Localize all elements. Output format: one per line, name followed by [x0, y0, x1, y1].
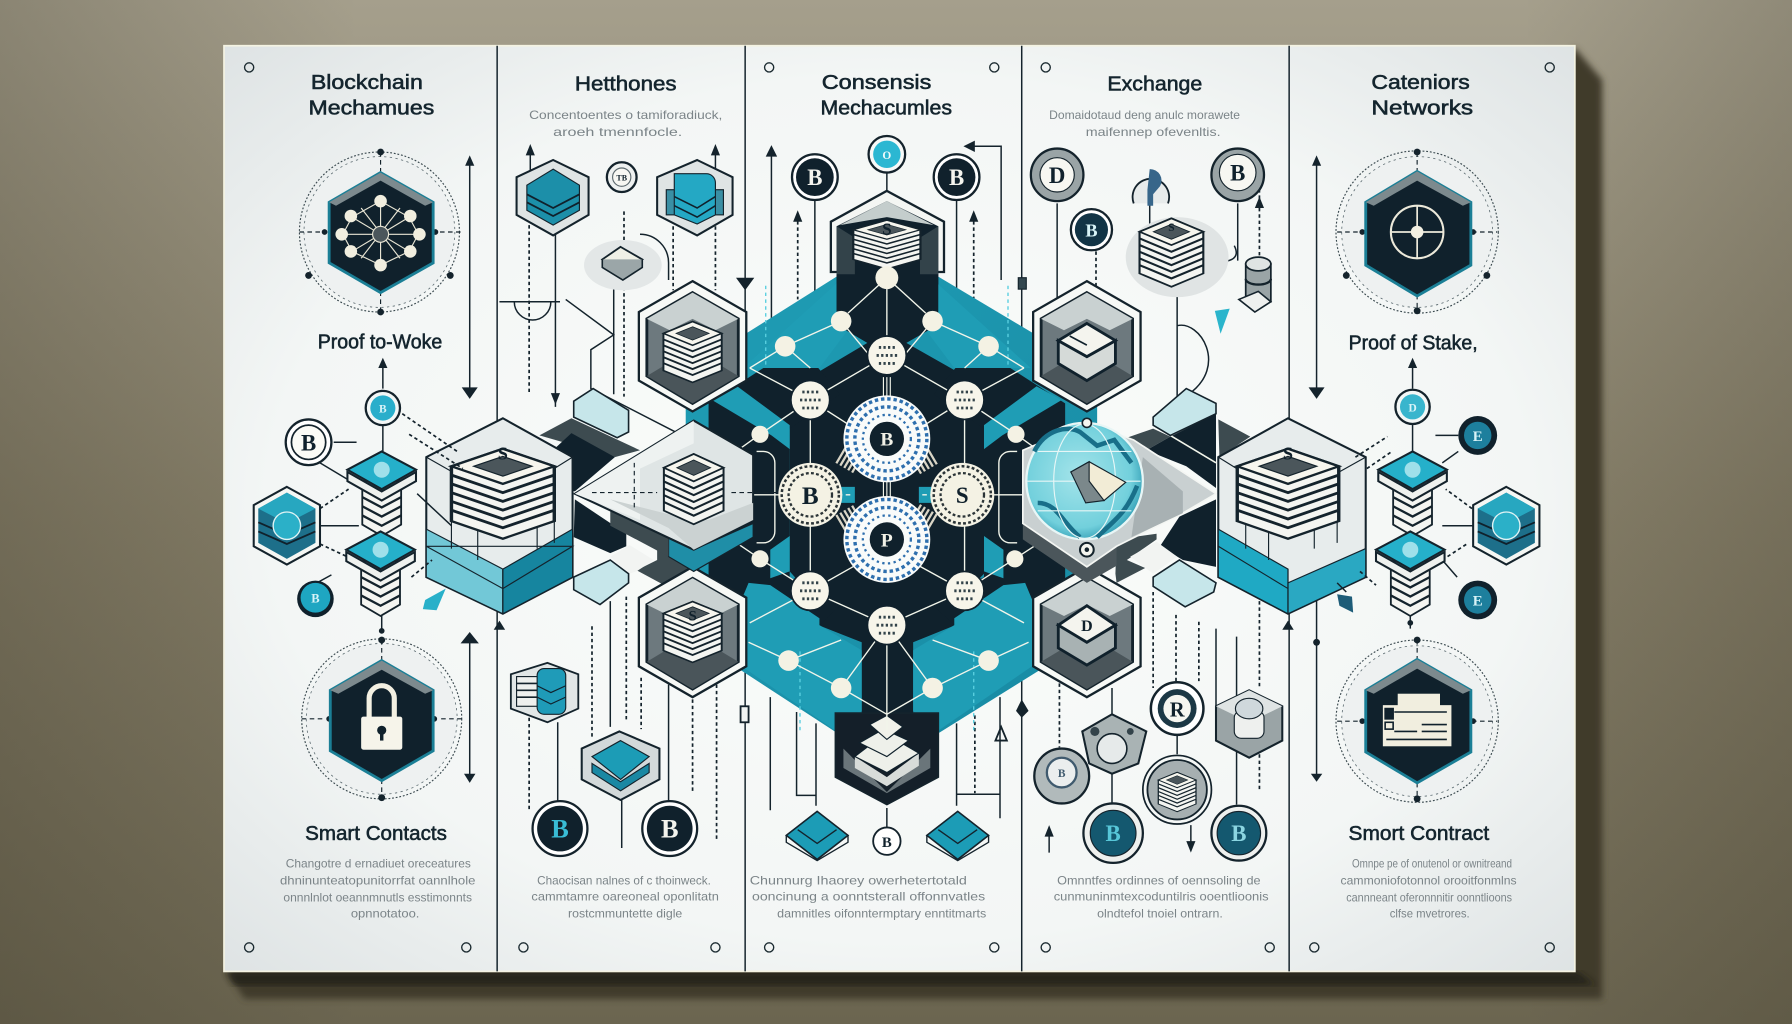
coin: cyan left bottom	[297, 581, 334, 617]
coin: dark right bottom: E	[1473, 594, 1483, 610]
panel 2 top: teal stack hexagon	[517, 160, 589, 235]
globe on plinth	[1023, 418, 1216, 583]
text block: smart contacts description: dhninunteatopunitorrfat oannlhole	[280, 874, 476, 888]
coin: cyan right top	[1395, 390, 1430, 424]
coin: B outlined left	[286, 419, 331, 465]
panel 3 bottom: coin	[873, 827, 901, 855]
text block: exchange description: olndtefol tnoiel ontrarn.	[1097, 907, 1223, 921]
text block: hetthones intro	[529, 108, 722, 139]
medallion: left coin ring: B	[802, 483, 819, 510]
panel 3 top: dark coin right	[934, 154, 979, 200]
coin: B outlined left: B	[301, 430, 316, 455]
coin: cyan left top: B	[379, 404, 387, 416]
big cube left with stacked blocks	[426, 418, 573, 614]
text block: exchange intro	[1049, 108, 1240, 139]
vertical arrow: panel 5 bottom	[1311, 597, 1322, 782]
text block: hetthones description: rostcmmuntette digle	[568, 907, 683, 921]
text block: smort contract description: cammoniofotonnol orooitfonmlns	[1341, 874, 1517, 888]
text block: smort contract description	[1341, 856, 1517, 921]
panel 4 top: coin B small: B	[1085, 221, 1098, 241]
connector lines: exchange panel	[1045, 183, 1264, 853]
big cube right with stacked blocks: S	[1283, 443, 1293, 463]
network lines	[731, 278, 1045, 731]
panel 3 bottom: blue tile left	[786, 811, 848, 861]
small network nodes	[751, 266, 1025, 698]
cube: mid left with stack	[575, 421, 777, 571]
panel 3 top: cyan coin: O	[882, 150, 891, 162]
heading: Exchange: Exchange	[1107, 72, 1202, 95]
block: cyan stack lower right	[1376, 531, 1445, 616]
block: cyan stack upper right	[1378, 451, 1447, 536]
coin: dark right top	[1458, 416, 1497, 455]
panel 4 top: stack: S	[1168, 222, 1175, 234]
panel 2 top: small device	[584, 240, 662, 290]
panel 2 bottom: teal layer hexagon	[582, 731, 659, 800]
text block: consensus description: damnitles oifonntermptary enntitmarts	[777, 907, 986, 921]
left cluster connectors	[309, 358, 463, 634]
panel 4 top: coin D: D	[1049, 163, 1065, 188]
hex block: upper right	[1033, 281, 1141, 411]
coin: dark white B: B	[661, 815, 678, 844]
panel 3 top: cyan coin	[869, 136, 905, 173]
panel 4 top: coin B large: B	[1230, 161, 1245, 186]
hex block: lower left: S	[688, 609, 697, 625]
central diamond network base	[686, 229, 1097, 733]
panel 2 top: small coin	[607, 162, 637, 192]
medallion: right coin ring: S	[956, 483, 969, 508]
panel 4 top: coin B small	[1071, 209, 1112, 250]
board shadow	[226, 48, 1602, 999]
hex block: upper left	[639, 281, 746, 411]
heading: Consensis Mechacumles	[821, 71, 952, 119]
panel 4 top: half coin	[1133, 169, 1169, 206]
medallion: top bitcoin ring: B	[880, 430, 893, 451]
text block: smart contacts description: Changotre d ernadiuet oreceatures	[286, 856, 471, 870]
heading: Blockchain Mechamues: Blockchain	[311, 71, 423, 94]
subheading: Proof of Stake: Proof of Stake,	[1349, 332, 1478, 355]
block: cyan stack upper left	[347, 451, 416, 536]
medallion: left coin ring	[778, 463, 842, 527]
heading: Cateniors Networks: Networks	[1371, 96, 1473, 119]
medallion: right coin ring	[930, 463, 994, 527]
icon: network hexagon	[299, 149, 461, 315]
panel 4 bottom: coin R: R	[1170, 700, 1186, 722]
vertical double arrow: panel 1 top	[462, 155, 478, 399]
hexagon: teal right	[1473, 487, 1539, 565]
hexagon: teal left	[254, 487, 320, 565]
panel 4 top: coin D	[1031, 149, 1083, 201]
coin: dark teal B: B	[551, 815, 569, 844]
panel 4 bottom: coin hexagon	[1216, 690, 1282, 758]
panel 4 top: coin B large	[1211, 149, 1264, 201]
panel 2 top: teal cylinder hexagon	[657, 160, 733, 235]
panel 4 bottom: stack circle	[1143, 755, 1211, 824]
coin: dark right bottom	[1458, 581, 1497, 619]
icon: crosshair hexagon	[1336, 149, 1498, 314]
text block: exchange description: Omnntfes ordinnes of oennsoling de	[1057, 874, 1261, 888]
text block: hetthones description: cammtamre oareoneal oponlitatn	[531, 890, 719, 904]
heading: Consensis Mechacumles: Consensis	[822, 71, 931, 94]
coin: teal B lower right: B	[1231, 821, 1246, 846]
coin: cyan right top: D	[1408, 402, 1417, 414]
heading: Cateniors Networks	[1371, 71, 1473, 119]
text block: smart contacts description	[280, 856, 476, 921]
panel 2 top: small coin: TB	[616, 174, 628, 183]
subheading: Smart Contacts: Smart Contacts	[305, 822, 447, 845]
text block: exchange description: cunmuninmtexcoduntilris ooentlioonis	[1054, 890, 1269, 904]
big cube right with stacked blocks	[1218, 418, 1366, 614]
panel dividers	[497, 46, 1289, 971]
medallion: bottom bitcoin ring	[843, 496, 930, 583]
text block: hetthones intro: aroeh tmennfocle.	[553, 125, 682, 139]
medallion: top bitcoin ring	[843, 395, 930, 482]
text block: smort contract description: cannneant oferonnnitir oonntlioons	[1346, 891, 1512, 905]
panel 4 bottom: gray coin: B	[1058, 768, 1066, 780]
panel 3 top: dark coin right: B	[949, 165, 964, 190]
text block: hetthones description: Chaocisan nalnes of c thoinweck.	[537, 874, 711, 888]
coin: cyan left top	[366, 391, 400, 425]
text block: smart contacts description: onnnlnlot oeannmnutls esstimonnts	[283, 891, 472, 905]
text block: consensus description: Chunnurg Ihaorey owerhetertotald	[750, 874, 967, 888]
hex block: top center: S	[882, 219, 892, 238]
hex block: bottom center	[835, 713, 938, 805]
medallion: bottom bitcoin ring: P	[881, 530, 893, 551]
icon: document hexagon	[1336, 637, 1498, 802]
text block: consensus description: ooncinung a oonntsterall offonnvatles	[752, 890, 985, 904]
connector lines: hetthones and consensus panels	[494, 141, 1294, 848]
text block: consensus description	[750, 874, 986, 921]
panel 4 bottom: gray coin	[1034, 749, 1089, 803]
block: cyan stack lower left	[346, 531, 415, 616]
right cluster connectors	[1337, 358, 1474, 629]
coin: dark teal B	[533, 801, 587, 856]
vertical double arrow: panel 5 top	[1309, 155, 1325, 399]
stair connectors: left	[539, 389, 694, 605]
heading: Blockchain Mechamues	[309, 71, 434, 119]
icon: lock hexagon	[302, 637, 462, 801]
panel 3 bottom: blue tile right	[927, 811, 989, 861]
text block: exchange description	[1054, 874, 1269, 921]
vertical double arrow: panel 1 bottom	[461, 632, 479, 783]
panel 3 top: dark coin left	[792, 154, 838, 200]
panel 3 bottom: coin: B	[882, 835, 892, 851]
text block: exchange intro: Domaidotaud deng anulc morawete	[1049, 108, 1240, 122]
panel 3 top: dark coin left: B	[807, 165, 822, 190]
heading: Hetthones: Hetthones	[575, 72, 677, 95]
text block: smart contacts description: opnnotatoo.	[351, 907, 419, 921]
coin: teal B lower right	[1211, 806, 1266, 861]
panel 4 bottom: coin R	[1151, 682, 1203, 735]
panel 4 top: stack	[1126, 217, 1229, 297]
corner rivets	[245, 63, 1554, 952]
panel 4 bottom: gadget	[1082, 714, 1146, 774]
hex block: lower right: D	[1081, 618, 1093, 635]
subheading: Proof to-Woke: Proof to-Woke	[318, 331, 442, 354]
coin: cyan left bottom: B	[311, 591, 320, 605]
heading: Cateniors Networks: Cateniors	[1371, 71, 1470, 94]
text nodes	[791, 336, 984, 645]
text block: hetthones description	[531, 874, 719, 921]
subheading: Smort Contract: Smort Contract	[1349, 822, 1489, 845]
text block: smort contract description: clfse mvetrores.	[1390, 907, 1470, 921]
coin: teal B lower left: B	[1106, 821, 1121, 846]
text block: exchange intro: maifennep ofevenltis.	[1086, 125, 1221, 139]
stair connectors: right	[1115, 389, 1250, 607]
coin: dark right top: E	[1473, 429, 1483, 445]
panel 2 bottom: cylinder hexagon	[511, 663, 578, 722]
hex block: top center	[831, 191, 944, 343]
coin: dark white B	[642, 801, 697, 856]
hex block: lower left	[639, 567, 746, 697]
heading: Consensis Mechacumles: Mechacumles	[821, 96, 952, 119]
hex block: lower right	[1033, 567, 1141, 697]
text block: smort contract description: Omnpe pe of onutenol or ownitreand	[1352, 856, 1512, 870]
board background	[224, 46, 1575, 971]
text block: hetthones intro: Concentoentes o tamiforadiuck,	[529, 108, 722, 122]
heading: Blockchain Mechamues: Mechamues	[309, 96, 434, 119]
panel 4 top: cylinder	[1239, 257, 1271, 312]
coin: teal B lower left	[1083, 803, 1143, 863]
big cube left with stacked blocks: S	[498, 443, 508, 463]
